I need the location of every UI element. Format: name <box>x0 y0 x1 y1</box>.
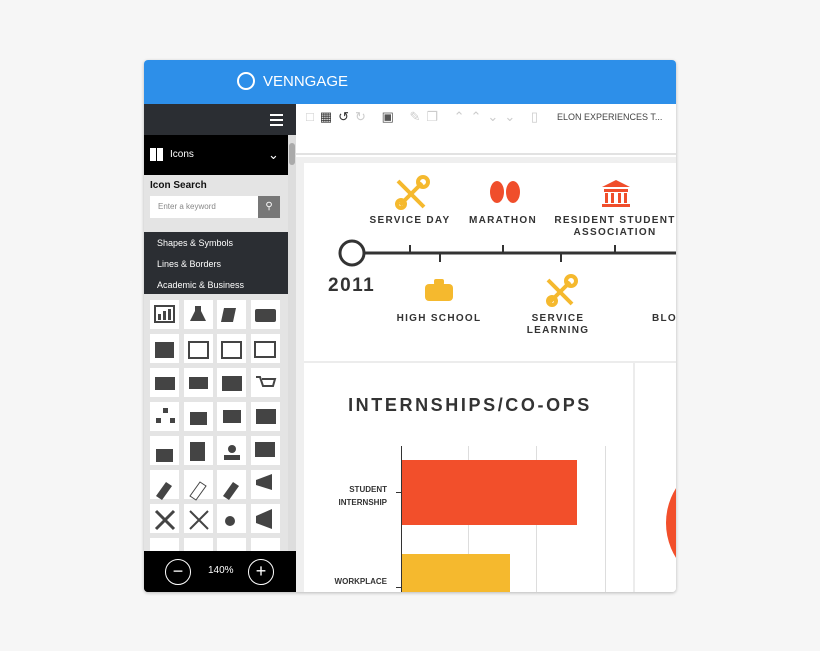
timeline: ASSOCIATION <box>573 227 656 238</box>
sidebar <box>144 104 296 592</box>
zoom bar: − <box>173 561 183 581</box>
icon search: Enter a keyword <box>158 202 216 211</box>
toolbar <box>296 104 676 155</box>
header bar <box>144 60 676 104</box>
app window <box>144 60 676 592</box>
icon search: Icon Search <box>150 180 207 191</box>
year label: 2011 <box>328 275 375 296</box>
infographic canvas <box>304 163 676 592</box>
icon: tools service day <box>397 177 428 208</box>
icon search <box>144 175 288 232</box>
icons dropdown: ⌄ <box>268 147 279 162</box>
bar chart: STUDENT <box>349 485 387 494</box>
timeline: SERVICE DAY <box>370 215 450 226</box>
toolbar: □▦↺↻ ▣ ✎❐ ⌃⌃⌄⌄ ▯ <box>306 109 544 124</box>
timeline <box>328 175 676 336</box>
icon: tools service learning <box>548 276 576 305</box>
timeline: MARATHON <box>469 215 537 226</box>
partial pie <box>666 457 798 589</box>
icon search: ⚲ <box>265 201 273 212</box>
icon: building <box>602 180 630 207</box>
icon: marathon feet <box>490 181 520 203</box>
timeline: HIGH SCHOOL <box>397 313 481 324</box>
scrollbar <box>288 135 296 551</box>
timeline: RESIDENT STUDENT <box>554 215 676 226</box>
toolbar: ELON EXPERIENCES T... <box>557 112 662 122</box>
zoom bar: + <box>256 561 266 581</box>
timeline: SERVICE <box>532 313 584 324</box>
zoom bar: 140% <box>208 565 234 576</box>
canvas area <box>296 157 676 592</box>
bar chart <box>334 446 606 592</box>
chart title: INTERNSHIPS/CO-OPS <box>348 395 592 415</box>
bar chart: WORKPLACE <box>335 577 387 586</box>
icons dropdown <box>144 135 288 175</box>
hamburger <box>270 114 283 126</box>
categories: Academic & Business <box>157 280 244 290</box>
logo: VENNGAGE <box>263 73 348 90</box>
timeline: LEARNING <box>527 325 589 336</box>
icon: backpack <box>425 279 453 301</box>
bar chart: INTERNSHIP <box>339 498 387 507</box>
categories: Lines & Borders <box>157 259 221 269</box>
icons dropdown: Icons <box>170 149 194 160</box>
categories <box>144 232 288 294</box>
icon grid <box>144 294 288 551</box>
categories: Shapes & Symbols <box>157 238 233 248</box>
zoom bar <box>144 551 296 592</box>
